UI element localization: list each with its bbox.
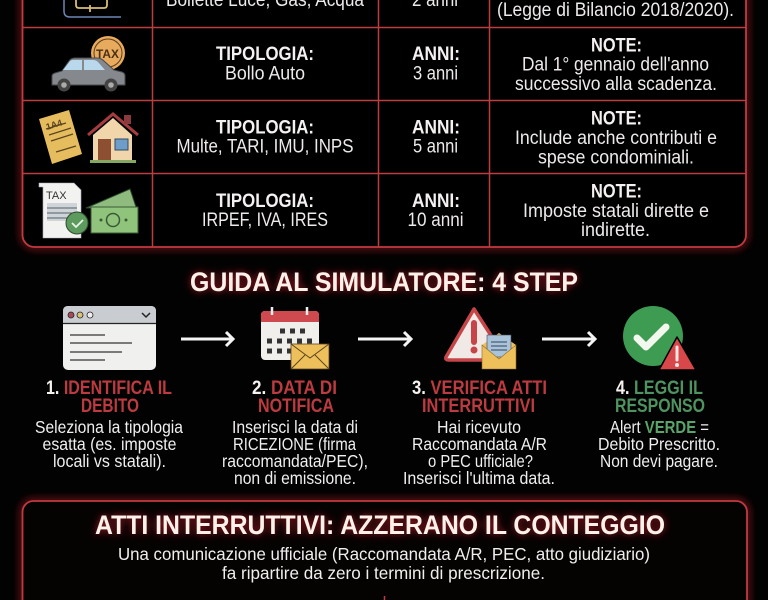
icon: fine ticket and house [39,110,138,164]
icon: utilities bills [64,0,121,17]
car tax type [216,44,314,84]
step 3 description: Raccomandata A/R [412,434,547,454]
state taxes years: ANNI: [412,191,460,212]
icon: calendar and envelope [261,307,329,369]
local taxes type: Multe, TARI, IMU, INPS [176,137,354,158]
step 1 title: DEBITO [81,396,139,417]
step 3 title [412,378,547,417]
step 4 title: RESPONSO [615,396,705,417]
step 1 title: 1. IDENTIFICA IL [46,378,172,399]
timeline stub [384,596,386,600]
local taxes type: TIPOLOGIA: [216,118,314,139]
arrow 1 [181,332,233,346]
step 4 title [615,378,705,417]
step 4 title: 4. LEGGI IL [616,378,703,399]
icon: car with tax badge: TAX [96,47,119,61]
car tax years [412,44,460,84]
car tax note: NOTE: [591,36,642,56]
icon: green check and warning [623,306,696,370]
icon: warning triangle and envelope [446,309,516,369]
arrow 2 [358,332,411,346]
row: local taxes [39,109,717,168]
icon: tax form and banknotes: TAX [46,190,67,202]
heading: simulator guide: GUIDA AL SIMULATORE: 4 STEP [190,267,578,297]
step 2 title: NOTIFICA [258,396,334,417]
row: state taxes [39,181,709,241]
local taxes years: 5 anni [413,137,458,158]
state taxes note: NOTE: [591,181,642,202]
state taxes note: indirette. [581,220,650,241]
step 2 description: RICEZIONE (firma [233,434,356,454]
state taxes type [202,191,328,231]
car tax type: Bollo Auto [225,64,305,84]
local taxes years [412,118,460,158]
local taxes years: ANNI: [412,118,460,139]
panel description: fa ripartire da zero i termini di prescrizione. [222,563,545,583]
step 1 description: esatta (es. imposte [42,434,176,454]
local taxes note: spese condominiali. [538,148,694,168]
step 3 description: Hai ricevuto [437,417,521,437]
panel description [118,544,650,583]
car tax type: TIPOLOGIA: [216,44,314,65]
state taxes type: TIPOLOGIA: [216,191,314,212]
local taxes note: NOTE: [591,109,642,130]
car tax note [515,36,717,95]
panel description: Una comunicazione ufficiale (Raccomandata A/R, PEC, atto giudiziario) [118,544,650,564]
step 1 [35,306,183,471]
step 2 description: raccomandata/PEC), [222,451,368,471]
state taxes note: Imposte statali dirette e [523,201,709,222]
state taxes years [408,191,464,231]
panel: interrupting acts [22,501,747,600]
step 2 [222,307,368,488]
state taxes type: IRPEF, IVA, IRES [202,210,328,231]
icon: fine ticket and house: 1A4 [45,118,63,132]
step 1 description [35,417,183,471]
utilities note: (Legge di Bilancio 2018/2020). [497,0,734,21]
step 2 title: 2. DATA DI [252,378,337,399]
step 2 description [222,417,368,488]
step 4 description [598,417,720,471]
step 2 description: non di emissione. [234,468,356,488]
panel: prescription table [22,0,746,247]
step 1 description: locali vs statali). [53,451,166,471]
step 4 description: Non devi pagare. [600,451,718,471]
step 3 description: Inserisci l'ultima data. [403,468,555,488]
step 3 title: 3. VERIFICA ATTI [412,378,547,399]
icon: car with tax badge [52,36,125,92]
state taxes years: 10 anni [408,210,464,231]
car tax years: 3 anni [413,64,458,84]
step 3 [403,309,555,488]
arrow 3 [542,332,595,346]
step 3 description [403,417,555,488]
step 4 description: Alert VERDE = [610,417,709,437]
car tax years: ANNI: [412,44,460,65]
step 2 description: Inserisci la data di [232,417,358,437]
state taxes note [523,181,709,241]
step 2 title [252,378,337,417]
step 3 title: INTERRUTTIVI [422,396,535,417]
local taxes type [176,118,354,158]
step 3 description: o PEC ufficiale? [428,451,533,471]
local taxes note [515,109,717,168]
icon: browser window [63,306,156,370]
row: car tax [52,36,717,95]
local taxes note: Include anche contributi e [515,128,717,149]
step 4 [598,306,720,471]
step 1 description: Seleziona la tipologia [35,417,183,437]
step 1 title [46,378,172,417]
row: utilities [64,0,734,21]
car tax note: Dal 1° gennaio dell'anno [522,55,709,76]
car tax note: successivo alla scadenza. [515,74,717,95]
icon: tax form and banknotes [39,183,138,238]
panel heading: ATTI INTERRUTTIVI: AZZERANO IL CONTEGGIO [95,510,665,540]
step 4 description: Debito Prescritto. [598,434,720,454]
